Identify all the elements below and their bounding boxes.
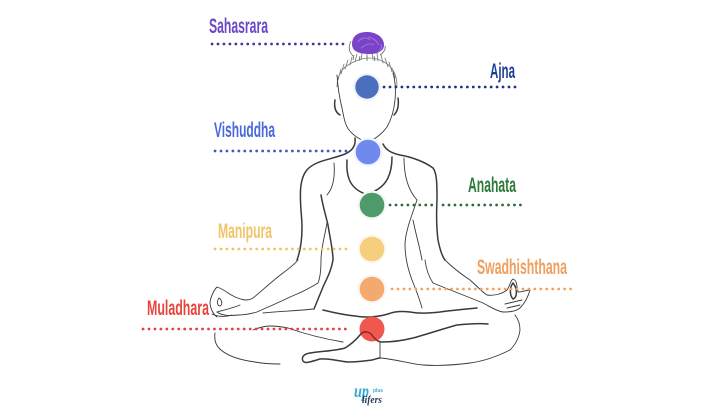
chakra: Sahasrara bbox=[349, 32, 385, 61]
hair strands bbox=[337, 52, 397, 87]
label: Swadhishthana: Swadhishthana bbox=[477, 256, 567, 279]
face and ears bbox=[337, 73, 395, 141]
dotted line: Manipura bbox=[215, 248, 350, 250]
logo: uplifers bbox=[354, 381, 383, 406]
waist and legs bbox=[263, 309, 313, 313]
dotted line: Swadhishthana bbox=[392, 288, 572, 290]
chakra: Swadhishthana bbox=[358, 274, 386, 304]
dotted line: Sahasrara bbox=[212, 43, 348, 45]
dotted line: Anahata bbox=[390, 204, 524, 206]
shoulders and arms bbox=[297, 138, 355, 260]
chakra: Anahata bbox=[358, 190, 386, 220]
label: Anahata: Anahata bbox=[468, 174, 516, 197]
chakra: Vishuddha bbox=[354, 138, 382, 166]
chakra: Muladhara bbox=[360, 316, 384, 342]
dotted line: Muladhara bbox=[143, 328, 350, 330]
logo: uplifers: plus bbox=[373, 388, 383, 394]
seated figure line art bbox=[210, 52, 530, 365]
chakra: Manipura bbox=[358, 234, 386, 264]
label: Vishuddha: Vishuddha bbox=[214, 119, 275, 142]
right arm and hand bbox=[425, 260, 530, 312]
label: Manipura: Manipura bbox=[218, 220, 272, 243]
logo: uplifers: up bbox=[354, 381, 369, 401]
chakra: Ajna bbox=[353, 73, 381, 101]
left hand fingers bbox=[212, 298, 240, 316]
label: Sahasrara: Sahasrara bbox=[209, 15, 268, 38]
label: Muladhara: Muladhara bbox=[147, 297, 209, 320]
logo: uplifers: lifers bbox=[362, 395, 382, 406]
label: Ajna: Ajna bbox=[490, 60, 515, 83]
dotted line: Vishuddha bbox=[215, 150, 350, 152]
dotted line: Ajna bbox=[384, 86, 518, 88]
